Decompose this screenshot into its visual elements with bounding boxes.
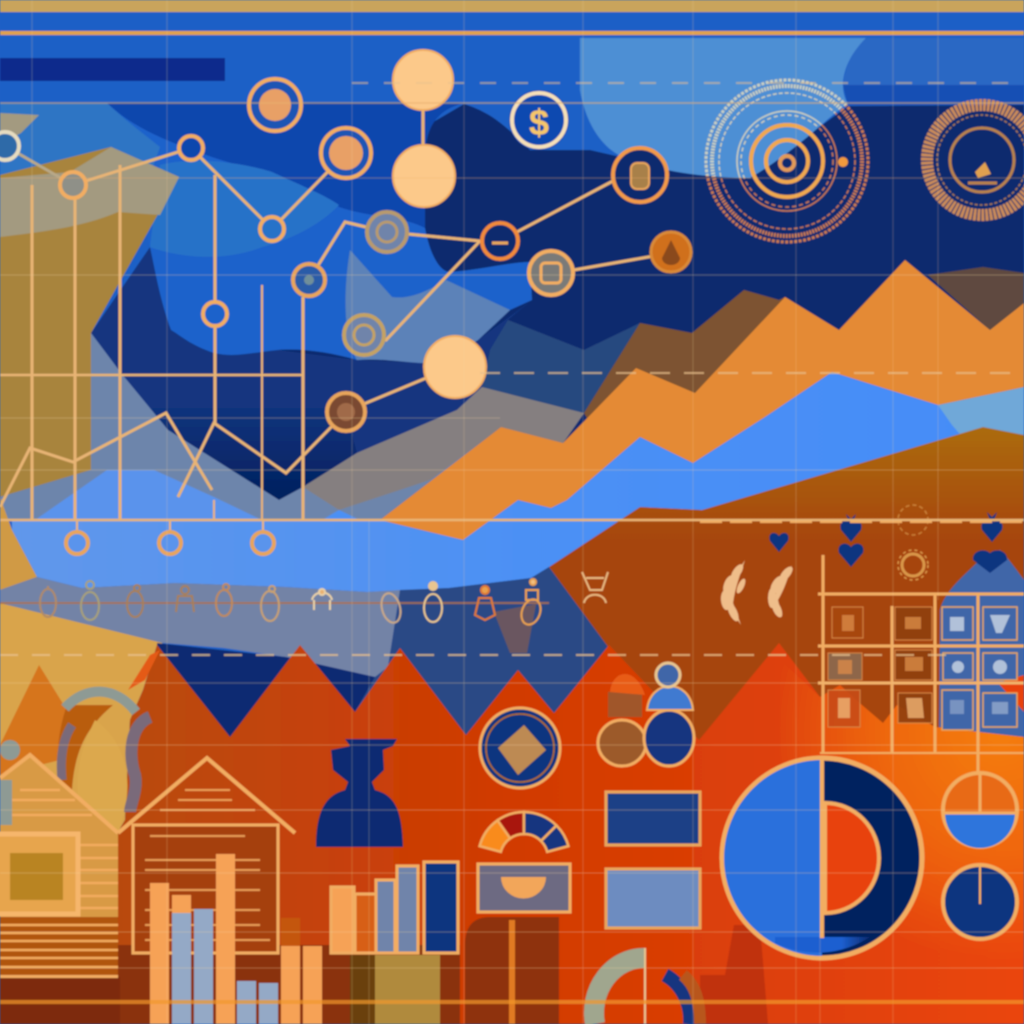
dashed guide lines	[0, 83, 1024, 655]
rounded medallion	[480, 708, 560, 788]
medium blue body	[107, 103, 532, 363]
deepest navy valley	[150, 408, 357, 500]
slate band	[482, 320, 640, 413]
teal wave left	[0, 103, 160, 178]
line chart nodes	[0, 132, 284, 554]
blue band	[12, 372, 1024, 592]
blue band peak	[322, 510, 360, 520]
top banner strip	[0, 0, 1024, 35]
laurels	[720, 560, 795, 625]
light blue blob upper right	[580, 38, 866, 178]
red zigzag field	[118, 643, 1024, 1024]
red streak right	[998, 675, 1024, 712]
tan block under chart	[375, 955, 440, 1024]
grey band mid	[0, 333, 584, 520]
gauge panel	[478, 864, 570, 912]
pie chart large	[722, 758, 922, 958]
brown back ridge	[584, 290, 785, 440]
navy lower field	[91, 247, 532, 500]
circle ornaments	[898, 505, 928, 580]
grey blue veil	[346, 250, 510, 363]
lower left dark band	[0, 977, 120, 1024]
gauge circle small	[943, 750, 1017, 848]
tan panel left	[0, 147, 179, 497]
navy title bar	[0, 58, 225, 81]
navy triangles band	[157, 643, 375, 760]
orange mountain ridge	[380, 260, 1024, 540]
concentric dial right	[927, 105, 1024, 215]
tan wedge top left	[0, 113, 39, 145]
dark wave upper centre	[107, 103, 464, 240]
gold left slope	[0, 603, 163, 832]
bar chart bottom left	[150, 854, 322, 1024]
dark column block	[465, 917, 559, 1024]
concentric dial left	[706, 80, 868, 242]
person icons	[598, 663, 694, 766]
navy rectangles	[606, 792, 700, 928]
pale teal right	[938, 387, 1024, 440]
small person icons row	[0, 572, 608, 627]
navy field upper right	[91, 104, 1024, 540]
gauge icon	[480, 812, 568, 852]
lighter lobe	[150, 161, 339, 257]
grey brown right peak	[928, 267, 1024, 330]
blue band upper left	[35, 470, 262, 520]
icon: graduate silhouette	[316, 739, 403, 847]
gold upper tip	[0, 497, 37, 590]
large icon grid	[818, 555, 1024, 753]
brown right mountain	[549, 427, 1024, 760]
grey blue lower band	[0, 577, 400, 677]
bottom ring	[594, 948, 700, 1024]
dark olive block	[350, 955, 375, 1024]
dark red shape lower right	[700, 925, 768, 1024]
brown wedge in slate block	[494, 604, 536, 653]
connector lines	[0, 110, 1024, 533]
house centre	[118, 758, 295, 953]
blue wedge right	[939, 550, 1024, 737]
flame figures left	[0, 650, 160, 832]
mid blue blob top right	[843, 38, 1024, 85]
bar chart centre	[331, 862, 458, 953]
background: upper blue field	[0, 0, 1024, 700]
large peach circles	[393, 50, 486, 398]
dollar badge: $	[529, 102, 549, 143]
warm grey band	[303, 387, 584, 510]
dark blue band top right	[843, 85, 1024, 105]
hearts row	[769, 512, 1007, 573]
orange glow right	[780, 660, 1024, 960]
dollar badge	[509, 90, 569, 150]
lower dark band	[118, 945, 460, 1024]
icon badges	[249, 79, 691, 431]
slate lower block	[340, 567, 608, 760]
house left	[0, 755, 118, 978]
pie circle small	[943, 865, 1017, 939]
tan panel translucent top	[0, 147, 179, 237]
